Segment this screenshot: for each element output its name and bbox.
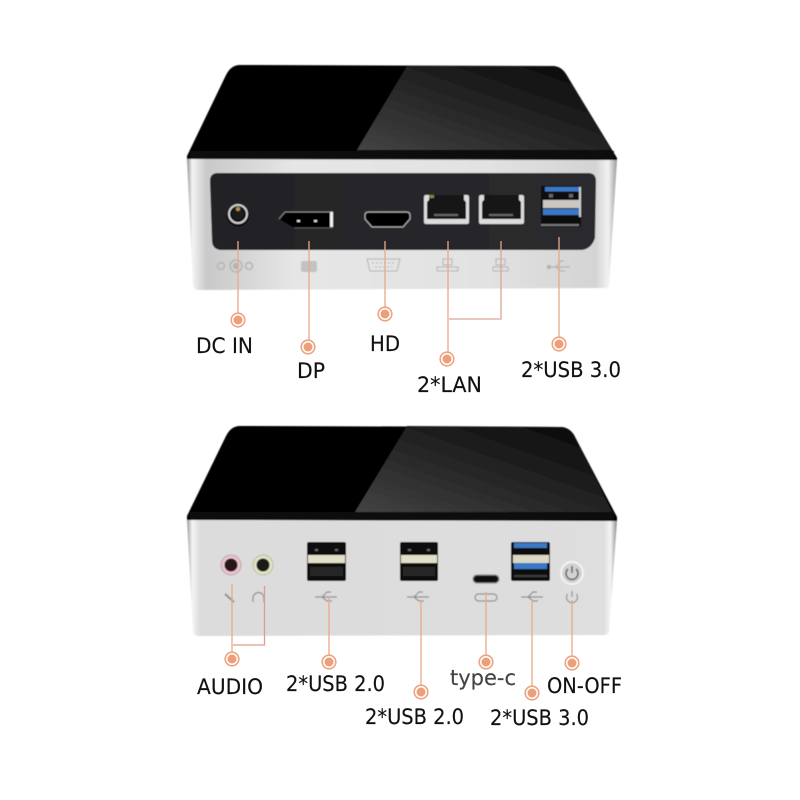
port: DC jack [226, 204, 250, 226]
printed port icons [225, 591, 578, 603]
port: USB 2.0 centre [400, 542, 438, 581]
marker: USB 2.0 left [322, 655, 336, 669]
label: AUDIO: AUDIO [197, 675, 263, 699]
silver front face [187, 520, 617, 636]
marker: USB 2.0 centre [414, 685, 428, 699]
top lid [187, 65, 617, 161]
port: DisplayPort [279, 212, 333, 228]
port: USB 2.0 left [307, 542, 346, 581]
marker: type-c [479, 655, 493, 669]
silver front face [187, 159, 617, 290]
marker: DP [301, 340, 315, 354]
label: HD: HD [370, 332, 400, 356]
device: rear view with port panel [187, 65, 617, 290]
top lid [187, 426, 617, 521]
leader lines: front view [232, 584, 572, 687]
label: 2*USB 2.0 left: 2*USB 2.0 [286, 672, 385, 696]
port: HDMI [365, 212, 410, 227]
port: USB 3.0 [511, 542, 550, 581]
marker: USB 3.0 [525, 686, 539, 700]
port: USB 3.0 stack [541, 186, 581, 227]
label: DP: DP [297, 359, 325, 383]
label: 2*USB 3.0: 2*USB 3.0 [490, 706, 589, 730]
power button [561, 562, 583, 584]
printed port icons [218, 259, 570, 272]
marker: ON-OFF [565, 656, 579, 670]
label: DC IN: DC IN [196, 334, 253, 358]
marker: HD [378, 307, 392, 321]
marker: USB 3.0 [552, 337, 566, 351]
leader lines: rear view [238, 237, 559, 353]
port: audio headphones [253, 555, 273, 575]
port: LAN 2 [479, 195, 524, 224]
dark port panel [210, 173, 596, 250]
port: audio mic [221, 555, 241, 575]
label: 2*LAN: 2*LAN [417, 373, 482, 397]
marker: LAN [440, 352, 454, 366]
label: 2*USB 3.0: 2*USB 3.0 [521, 358, 621, 382]
marker: AUDIO [225, 652, 239, 666]
device: front view with ports [187, 426, 617, 636]
label: 2*USB 2.0 centre: 2*USB 2.0 [365, 705, 464, 729]
label: ON-OFF: ON-OFF [547, 674, 622, 698]
label: type-c: type-c [450, 666, 516, 690]
port: LAN 1 [424, 195, 469, 224]
marker: DC IN [231, 313, 245, 327]
port: type-c [473, 575, 499, 583]
